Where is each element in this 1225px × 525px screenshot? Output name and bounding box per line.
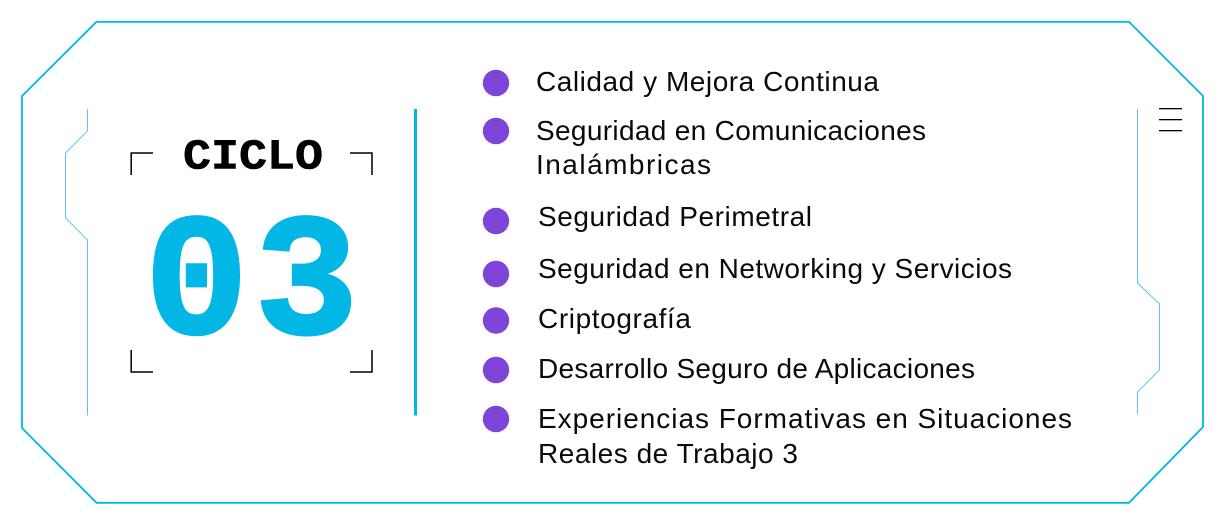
number: 03: 3 [254, 189, 358, 386]
heading: CICLO: CICLO [183, 132, 323, 182]
list item: Desarrollo Seguro de Aplicaciones: Desarrollo Seguro de Aplicaciones [538, 353, 975, 384]
list item: Experiencias Formativas en Situaciones Reales de Trabajo 3 [483, 403, 1072, 469]
course list [483, 66, 1072, 469]
vertical divider [414, 109, 417, 416]
list item: Criptografía: Criptografía [538, 303, 691, 334]
list item: Seguridad en Comunicaciones Inalámbricas: Inalámbricas [536, 149, 711, 180]
icon: three-line menu [1159, 108, 1182, 131]
list item: Seguridad en Comunicaciones Inalámbricas [483, 115, 926, 180]
corner brackets [131, 153, 372, 372]
list item: Experiencias Formativas en Situaciones Reales de Trabajo 3: Reales de Trabajo 3 [538, 438, 798, 469]
left circuit line [66, 109, 88, 416]
list item: Seguridad Perimetral: Seguridad Perimetral [538, 201, 812, 232]
number: 03 [144, 189, 358, 386]
right circuit line [1138, 109, 1160, 414]
number: 03: 0 [144, 189, 248, 386]
list item: Experiencias Formativas en Situaciones Reales de Trabajo 3: Experiencias Formativas en Situaciones [538, 403, 1072, 434]
list item: Calidad y Mejora Continua: Calidad y Mejora Continua [536, 66, 879, 97]
list item: Seguridad en Comunicaciones Inalámbricas: Seguridad en Comunicaciones [536, 115, 926, 146]
list item: Seguridad en Networking y Servicios: Seguridad en Networking y Servicios [538, 253, 1012, 284]
